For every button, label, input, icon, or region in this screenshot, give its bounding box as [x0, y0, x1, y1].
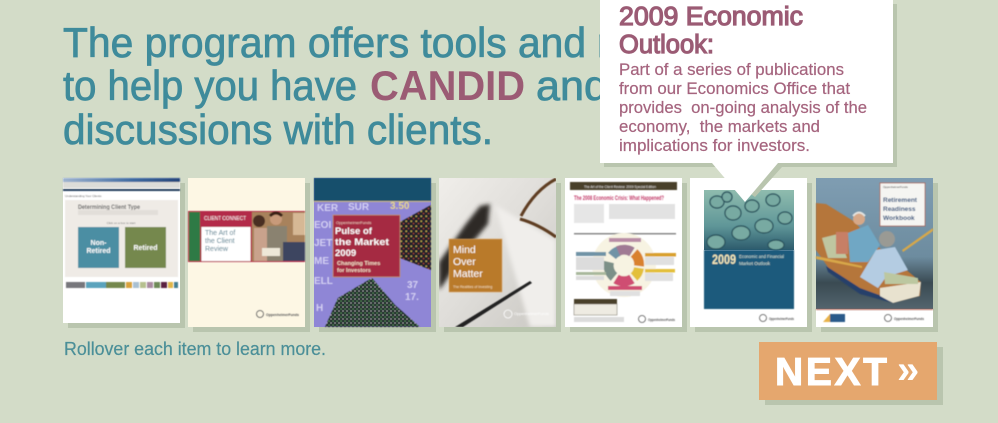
heading [63, 19, 781, 153]
thumbnail: 2009 Economic and Financial Market Outlook: Economic and Financial [739, 254, 784, 260]
thumbnail: 2009 Economic and Financial Market Outlook: OppenheimerFunds [769, 316, 795, 321]
thumbnail: The 2008 Economic Crisis: The 2008 Economic Crisis: What Happened? [574, 196, 664, 202]
thumbnail: 2009 Economic and Financial Market Outlook [690, 178, 812, 332]
thumbnail: Pulse of the Market 2009: Pulse of [335, 226, 373, 237]
thumbnail: 2009 Economic and Financial Market Outlook: Market Outlook [739, 261, 771, 267]
thumbnail: client type web page: Non- [91, 240, 107, 247]
heading: The program offers tools and [63, 19, 586, 66]
thumbnail: The 2008 Economic Crisis [565, 178, 687, 332]
thumbnail: Pulse of the Market 2009: 17. [405, 292, 419, 303]
thumbnail: The 2008 Economic Crisis: The Art of the Client Review: 2009 Special Edition [584, 184, 656, 189]
thumbnail: client type web page: Understanding Your Clients [65, 194, 102, 198]
thumbnail: Pulse of the Market 2009: SUR [348, 202, 370, 213]
thumbnail: client type web page: Retired [133, 245, 158, 252]
next button: » [897, 348, 919, 392]
thumbnail: Retirement Readiness Workbook: Workbook [883, 215, 915, 222]
callout: 2009 Economic Outlook: Part of a series of publications [619, 61, 844, 79]
callout: 2009 Economic Outlook: implications for investors. [619, 137, 810, 155]
thumbnail: Pulse of the Market 2009: ME [314, 256, 329, 267]
thumbnail: The Art of the Client Review [188, 178, 310, 332]
thumbnail: Pulse of the Market 2009: 37 [407, 280, 419, 291]
thumbnail: Mind Over Matter: Over [453, 256, 476, 268]
thumbnail: The Art of the Client Review: Review [205, 246, 229, 253]
thumbnail: Retirement Readiness Workbook: OppenheimerFunds [883, 185, 908, 189]
thumbnail: Pulse of the Market 2009: the Market [335, 237, 390, 248]
rollover hint: Rollover each item to learn more. [64, 339, 326, 359]
callout: 2009 Economic Outlook: Outlook: [619, 31, 714, 59]
thumbnail: Pulse of the Market 2009: JET [314, 238, 332, 249]
thumbnail: Mind Over Matter: Mind [453, 244, 476, 256]
thumbnail: Pulse of the Market 2009: Changing Times [337, 261, 380, 267]
thumbnail: Retirement Readiness Workbook: Readiness [883, 206, 916, 213]
thumbnail: Retirement Readiness Workbook: Retirement [883, 197, 918, 204]
thumbnail: Pulse of the Market 2009 [314, 178, 436, 332]
next button: NEXT [775, 351, 887, 394]
thumbnail: client type web page: Determining Client Type [78, 205, 141, 211]
callout: 2009 Economic Outlook [600, 0, 897, 202]
heading: resources [597, 19, 781, 66]
callout: 2009 Economic Outlook: 2009 Economic [619, 3, 803, 31]
heading: CANDID [370, 62, 525, 109]
thumbnail: Retirement Readiness Workbook: OppenheimerFunds [894, 316, 925, 321]
heading: and [536, 62, 608, 109]
thumbnail: Mind Over Matter: OppenheimerFunds [514, 311, 549, 316]
thumbnail: Pulse of the Market 2009: 3.50 [390, 201, 410, 212]
thumbnail: The Art of the Client Review: the Client [205, 238, 235, 245]
thumbnail: Mind Over Matter [439, 178, 561, 332]
thumbnail: Pulse of the Market 2009: H [316, 303, 323, 314]
thumbnail: 2009 Economic and Financial Market Outlook: 2009 [712, 252, 736, 267]
thumbnail: The Art of the Client Review: OppenheimerFunds [266, 312, 300, 317]
thumbnail: Pulse of the Market 2009: for Investors [337, 268, 371, 274]
heading: to help you have [63, 62, 357, 109]
thumbnail: Pulse of the Market 2009: OppenheimerFunds [336, 220, 371, 225]
thumbnail: Mind Over Matter: The Realities of Investing [453, 285, 492, 289]
thumbnail: Pulse of the Market 2009: KER [317, 203, 339, 214]
thumbnail: The 2008 Economic Crisis: OppenheimerFunds [648, 317, 676, 322]
thumbnail: client type web page: Retired [86, 248, 111, 255]
callout: 2009 Economic Outlook: provides on-going analysis of the [619, 99, 867, 117]
thumbnail: Pulse of the Market 2009: 2009 [335, 248, 356, 259]
callout: 2009 Economic Outlook: economy, the markets and [619, 118, 820, 136]
thumbnail: The Art of the Client Review: CLIENT CONNECT [204, 216, 247, 222]
callout: 2009 Economic Outlook: from our Economics Office that [619, 80, 850, 98]
thumbnail: Pulse of the Market 2009: EOI [314, 220, 331, 231]
next button [759, 342, 943, 405]
thumbnail: Mind Over Matter: Matter [453, 268, 483, 280]
thumbnail: client type web page [63, 178, 185, 328]
heading: discussions with clients. [63, 106, 493, 153]
thumbnail: Pulse of the Market 2009: ELL [314, 276, 333, 287]
thumbnail: The Art of the Client Review: The Art of [205, 230, 235, 237]
thumbnail: client type web page: Click on a box to start [107, 221, 136, 225]
thumbnail: Retirement Readiness Workbook [816, 178, 938, 332]
